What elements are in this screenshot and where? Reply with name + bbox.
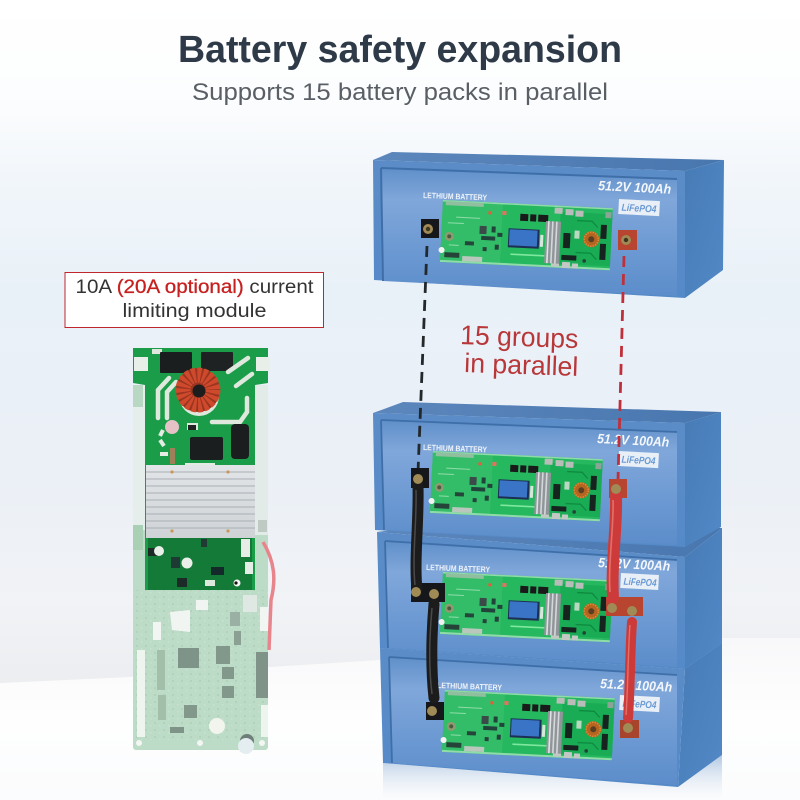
black cable between packs 2 and 3 xyxy=(411,468,445,602)
battery pack 4 (bottom) xyxy=(380,640,722,800)
label: voltage: 51.2V 100Ah xyxy=(597,431,670,450)
capacitors top xyxy=(160,352,192,373)
label: lethium battery: LETHIUM BATTERY xyxy=(423,191,488,202)
subtitle: Supports 15 battery packs in parallel xyxy=(192,79,608,106)
label: LiFePO4: LiFePO4 xyxy=(622,699,657,711)
pale side connectors xyxy=(133,385,145,530)
black cable between packs 3 and 4 xyxy=(426,589,444,720)
callout: current limiting module: limiting module xyxy=(122,300,266,322)
circuit board xyxy=(440,690,615,760)
label: voltage: 51.2V 100Ah xyxy=(598,555,671,574)
label: LiFePO4 xyxy=(618,199,660,216)
floor reflection xyxy=(383,755,722,800)
label: 15 groups in parallel: 15 groups xyxy=(460,320,579,354)
green PCB xyxy=(145,385,255,590)
toroid inductor xyxy=(176,368,220,416)
title: Battery safety expansion xyxy=(178,29,622,71)
label: LiFePO4: LiFePO4 xyxy=(621,455,656,467)
red cable between packs 3 and 4 xyxy=(620,606,639,738)
callout: current limiting module xyxy=(65,272,324,328)
red cable between packs 2 and 3 xyxy=(606,479,643,616)
control section parts xyxy=(148,538,252,590)
module board: current limiting PCB with faded BMS xyxy=(133,348,274,754)
label: LiFePO4 xyxy=(618,451,659,468)
circuit board xyxy=(438,200,613,270)
label: 15 groups in parallel xyxy=(460,320,579,382)
heat sink xyxy=(146,465,255,538)
red dashed link xyxy=(618,256,624,480)
lower capacitors and parts xyxy=(190,437,223,460)
battery pack 2 xyxy=(373,402,721,547)
label: lethium battery: LETHIUM BATTERY xyxy=(423,443,488,454)
label: lethium battery: LETHIUM BATTERY xyxy=(437,681,503,692)
circuit board xyxy=(428,451,603,521)
battery pack 1 (top) xyxy=(373,152,724,298)
label: LiFePO4 xyxy=(620,573,659,590)
label: LiFePO4: LiFePO4 xyxy=(623,577,657,589)
circuit board xyxy=(438,572,613,642)
label: LiFePO4 xyxy=(619,695,660,712)
label: 15 groups in parallel: in parallel xyxy=(464,348,579,382)
black dashed link xyxy=(418,246,427,472)
red terminal xyxy=(618,230,637,250)
label: lethium battery: LETHIUM BATTERY xyxy=(426,563,491,574)
callout: current limiting module: 10A (20A optional) current xyxy=(76,276,314,298)
red wire xyxy=(263,542,274,650)
label: LiFePO4: LiFePO4 xyxy=(621,203,657,215)
label: voltage: 51.2V 100Ah xyxy=(598,178,672,197)
white traces xyxy=(158,358,252,422)
faded BMS board xyxy=(133,530,268,754)
label: voltage: 51.2V 100Ah xyxy=(600,676,673,695)
black terminal xyxy=(421,219,439,238)
battery pack 3 xyxy=(377,526,722,669)
